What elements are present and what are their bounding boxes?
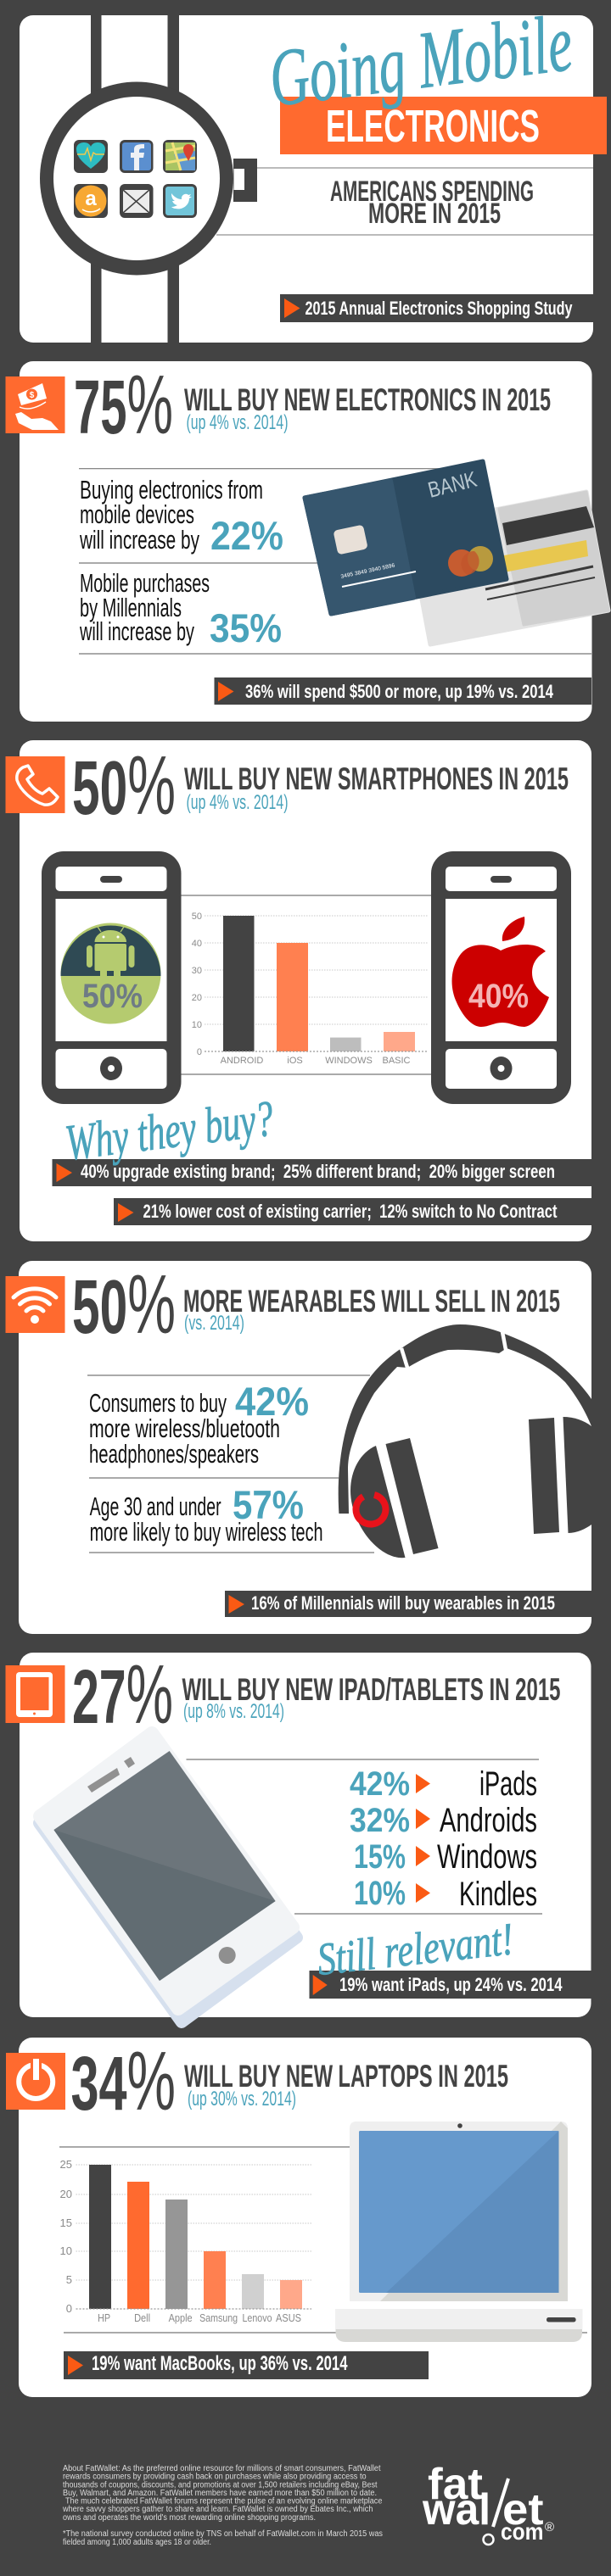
list: tablet brands: Kindles	[459, 1876, 537, 1913]
stat: 50%: 50%	[72, 1257, 176, 1351]
bar chart: laptop brands: 0	[66, 2302, 72, 2315]
sub-heading: (vs. 2014)	[184, 1312, 244, 1335]
list: tablet brands	[350, 1765, 537, 1913]
text block: age: 57%	[233, 1482, 304, 1527]
icon: amazon app: a	[85, 187, 97, 210]
footer: about text: thousands of coupons, discounts, and promotions at over 1,500 retailers including eBay, Best	[63, 2480, 378, 2490]
text block: mobile devices: mobile devices	[80, 499, 194, 529]
footer: about text	[62, 2464, 383, 2547]
footer: about text: owns and operates the world's most rewarding online shopping programs.	[63, 2513, 316, 2523]
illustration: credit cards: BANK	[425, 466, 479, 503]
bar chart: laptop brands	[60, 2158, 311, 2324]
text block: millennials: will increase by	[79, 616, 194, 646]
icon: map app	[163, 140, 197, 173]
list: tablet brands: 15%	[354, 1838, 406, 1876]
list: tablet brands: 32%	[350, 1802, 410, 1839]
text block: wireless: Consumers to buy	[89, 1388, 227, 1418]
bar chart: laptop brands: 10	[60, 2244, 72, 2257]
list: tablet brands: 42%	[350, 1765, 410, 1803]
text block: age: Age 30 and under	[90, 1492, 221, 1521]
stat: 27%: 27%	[72, 1648, 173, 1741]
subtitle: MORE IN 2015	[368, 198, 501, 230]
bar chart: smartphone share: 20	[192, 993, 202, 1003]
icon: amazon app	[74, 184, 108, 218]
callout: ipads	[309, 1971, 591, 1999]
icon: money in hand: $	[30, 391, 35, 400]
text block: wireless: more wireless/bluetooth	[89, 1413, 280, 1443]
bar chart: smartphone share	[192, 912, 429, 1066]
illustration: laptop	[335, 2122, 582, 2342]
footer: about text: rewards consumers by providing cash back on purchases while also providing access to	[63, 2473, 367, 2482]
text block: mobile devices	[79, 475, 283, 558]
icon: twitter app	[163, 184, 197, 218]
callout: macbooks: 19% want MacBooks, up 36% vs. 2014	[92, 2352, 348, 2375]
script heading: Still relevant!: Still relevant!	[315, 1913, 516, 1985]
stat: 34%: 34%	[71, 2034, 176, 2127]
text block: age	[90, 1482, 323, 1547]
text block: millennials	[79, 568, 282, 650]
bar chart: smartphone share: 0	[197, 1047, 202, 1057]
logo: fatwallet.com: ®	[545, 2520, 554, 2534]
icon: telephone	[5, 756, 64, 813]
icon: heart app	[74, 140, 108, 173]
bar chart: smartphone share: 10	[192, 1020, 202, 1030]
bar chart: smartphone share: ANDROID	[221, 1056, 263, 1066]
bar chart: smartphone share: WINDOWS	[325, 1056, 373, 1066]
footer: about text: Buy, Walmart, and Amazon. FatWallet members have earned more than $50 million to date.	[63, 2489, 377, 2498]
illustration: headphones	[339, 1324, 591, 1558]
text block: mobile devices: 22%	[210, 513, 283, 558]
watch illustration	[40, 15, 257, 343]
logo: fatwallet.com	[422, 2460, 554, 2545]
bar chart: laptop brands: 25	[60, 2158, 72, 2171]
bar chart: smartphone share: 40	[192, 939, 202, 949]
bar chart: laptop brands: HP	[98, 2311, 110, 2324]
logo: fatwallet.com: fat	[428, 2460, 483, 2509]
android badge: 50%	[82, 978, 143, 1015]
bar chart: smartphone share: BASIC	[382, 1056, 411, 1066]
footer: about text: *The national survey conducted online by TNS on behalf of FatWallet.com in March 2015 was	[63, 2529, 383, 2539]
text block: millennials: by Millennials	[80, 593, 182, 622]
logo: fatwallet.com: et	[502, 2485, 543, 2534]
illustration: tablet device	[39, 1733, 297, 2022]
list: tablet brands: iPads	[479, 1765, 537, 1803]
footer: about text: The much celebrated FatWallet forums represent the pulse of an evolving online marketplace	[65, 2496, 383, 2506]
panel: wearables	[5, 1257, 591, 1634]
bar chart: smartphone share: 50	[192, 912, 202, 922]
panel: tablets	[5, 1648, 591, 2022]
list: tablet brands: 10%	[354, 1875, 406, 1912]
footer: about text: where savvy shoppers gather to share and learn. FatWallet is owned by Ebates Inc., which	[62, 2505, 373, 2514]
icon: facebook app	[120, 140, 153, 173]
bar chart: laptop brands: ASUS	[276, 2311, 301, 2324]
panel: smartphones	[5, 739, 591, 1241]
text block: age: more likely to buy wireless tech	[90, 1517, 323, 1547]
bar chart: laptop brands: Samsung	[199, 2311, 238, 2324]
callout: spend	[214, 677, 591, 705]
list: tablet brands: Windows	[437, 1838, 537, 1876]
text block: millennials: Mobile purchases	[80, 568, 210, 598]
footer: about text: fielded among 1,000 adults ages 18 or older.	[63, 2538, 211, 2547]
icon: power	[6, 2053, 65, 2110]
apple badge	[452, 917, 549, 1027]
apple badge: 40%	[468, 978, 529, 1015]
icon: mail app	[120, 184, 153, 218]
illustration: credit cards	[305, 461, 608, 644]
panel: header	[20, 0, 607, 343]
panel: laptops	[6, 2034, 591, 2397]
panel: electronics	[5, 358, 608, 722]
subtitle	[330, 176, 534, 230]
text block: wireless	[89, 1379, 309, 1469]
bar chart: smartphone share: iOS	[287, 1056, 303, 1066]
icon: wifi	[5, 1276, 64, 1333]
text block: wireless: headphones/speakers	[89, 1439, 259, 1469]
script heading: Why they buy?: Why they buy?	[63, 1090, 277, 1171]
text block: millennials: 35%	[210, 605, 282, 650]
bar chart: laptop brands: Lenovo	[243, 2311, 272, 2324]
bar chart: smartphone share: 30	[192, 966, 202, 976]
illustration: credit cards: 3495 3849 3940 5896	[340, 563, 395, 580]
text block: mobile devices: will increase by	[79, 525, 199, 555]
sub-heading: (up 8% vs. 2014)	[183, 1700, 284, 1723]
sub-heading: (up 4% vs. 2014)	[187, 411, 289, 434]
bar chart: laptop brands: 5	[66, 2273, 72, 2286]
bar chart: laptop brands: Dell	[134, 2311, 150, 2324]
illustration: iphone	[431, 851, 571, 1104]
stat: 50%: 50%	[72, 739, 176, 832]
android badge	[61, 923, 161, 1024]
text block: mobile devices: Buying electronics from	[80, 475, 263, 505]
list: tablet brands: Androids	[440, 1802, 537, 1839]
logo: fatwallet.com: com	[501, 2518, 543, 2545]
icon: tablet	[5, 1665, 64, 1723]
stat: 75%: 75%	[74, 358, 173, 451]
text block: wireless: 42%	[235, 1379, 309, 1424]
icon: money in hand	[5, 376, 64, 433]
sub-heading: (up 4% vs. 2014)	[187, 791, 289, 814]
bar chart: laptop brands: 15	[60, 2216, 72, 2229]
sub-heading: (up 30% vs. 2014)	[188, 2088, 296, 2110]
footer: about text: About FatWallet: As the preferred online resource for millions of smart consumers, FatWallet	[63, 2464, 381, 2473]
illustration: android phone	[42, 851, 182, 1104]
bar chart: laptop brands: 20	[60, 2188, 72, 2200]
bar chart: laptop brands: Apple	[169, 2311, 193, 2324]
logo: fatwallet.com: wal	[422, 2485, 490, 2534]
callout: study name	[280, 294, 593, 322]
